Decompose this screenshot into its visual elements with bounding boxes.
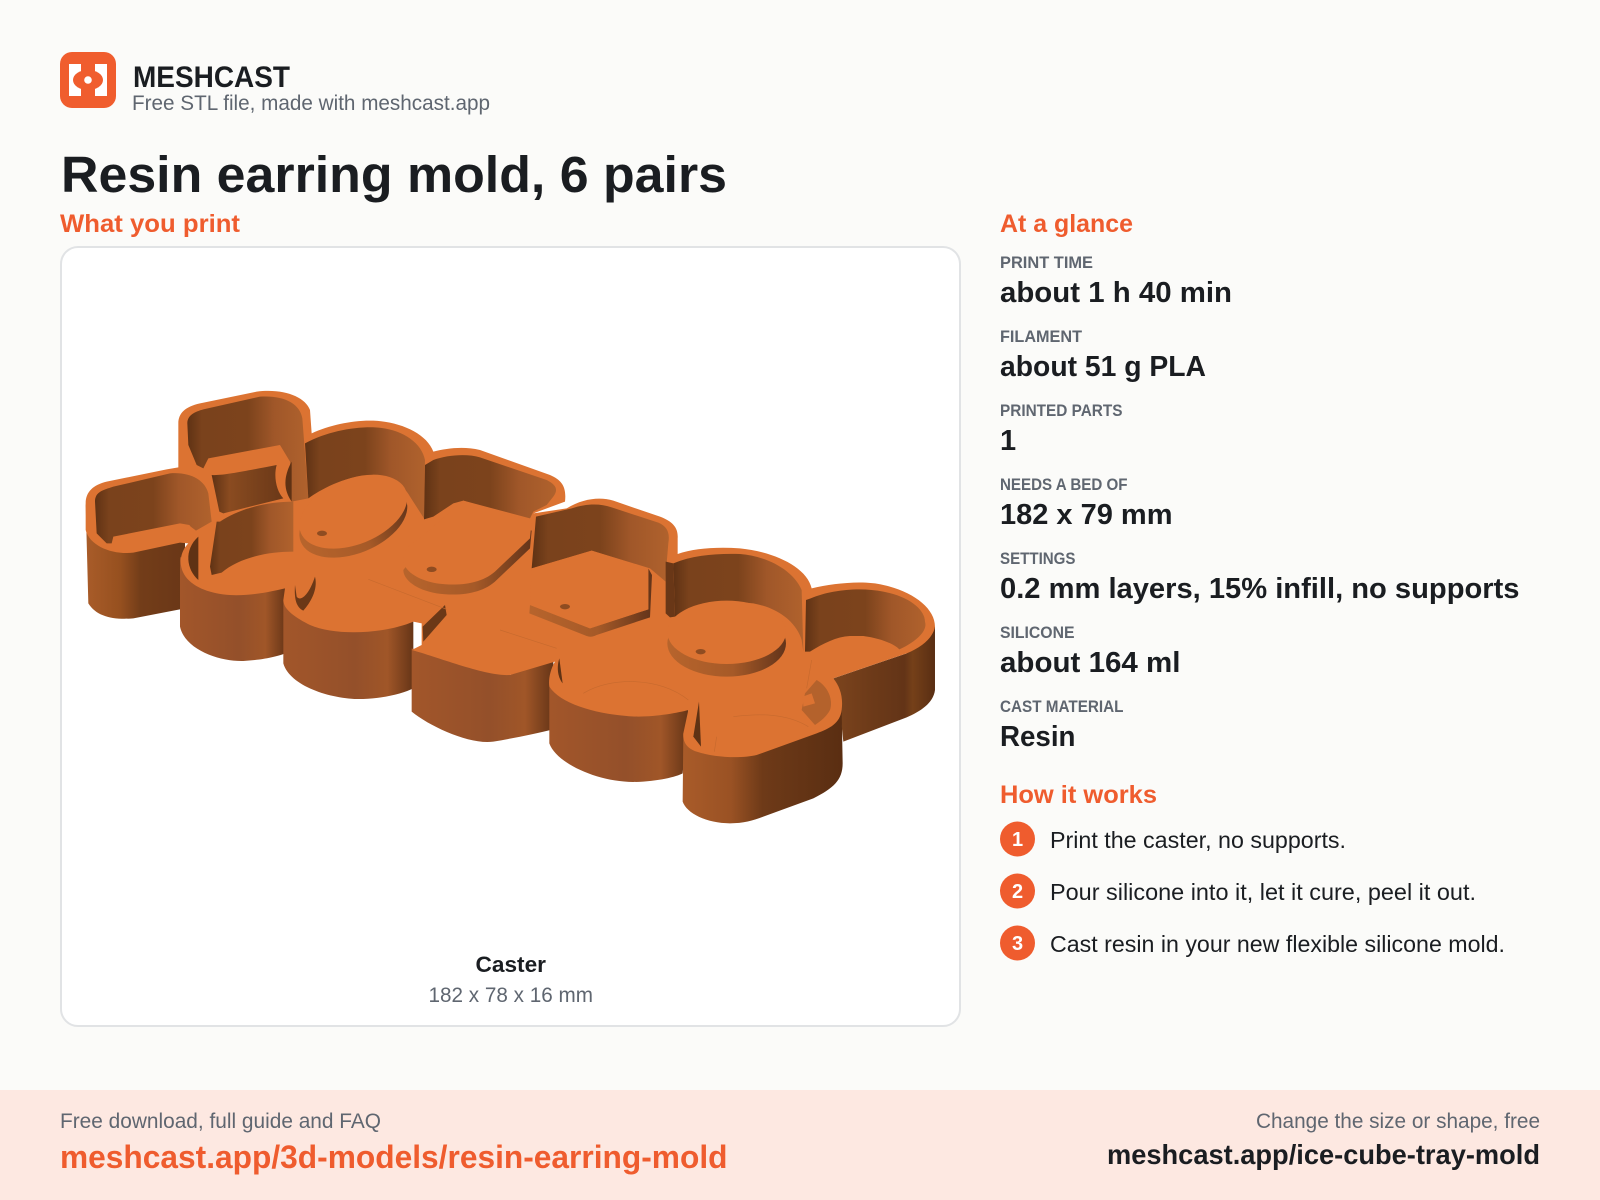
step 2: Pour silicone into it, let it cure, peel it out. [1050,879,1476,905]
step 1: 1 [1012,829,1023,851]
spec: settings: SETTINGS [1000,550,1076,568]
spec: print time [1000,254,1232,309]
step 2 [1000,874,1476,908]
right lobe back wall [805,589,925,652]
footer right caption: Change the size or shape, free [1256,1109,1540,1133]
spec: filament: about 51 g PLA [1000,351,1206,383]
spec: printed parts: 1 [1000,425,1016,457]
step 3: Cast resin in your new flexible silicone mold. [1050,931,1505,957]
raised oval earring blank [289,460,418,572]
spec: silicone: about 164 ml [1000,647,1180,679]
outer walls [86,503,935,823]
raised hexagon earring blank [529,551,652,637]
spec: silicone [1000,624,1180,679]
heading: At a glance: At a glance [1000,210,1133,238]
step 1 [1000,822,1346,856]
spec: bed size: NEEDS A BED OF [1000,476,1128,494]
3D model: resin earring mold caster [86,391,935,823]
spec: settings [1000,550,1520,605]
spec: printed parts: PRINTED PARTS [1000,402,1122,420]
spec: printed parts [1000,402,1122,457]
step 3 [1000,926,1505,960]
brand name: MESHCAST [133,61,290,94]
spec: cast material: CAST MATERIAL [1000,698,1124,716]
footer main link: meshcast.app/3d-models/resin-earring-mold [60,1139,728,1175]
header brand [60,52,490,115]
spec: cast material [1000,698,1124,753]
wall strip [666,562,675,617]
brand tagline: Free STL file, made with meshcast.app [132,92,490,115]
notches and interior details [558,658,831,752]
hexagon back wall [532,504,669,582]
raised round earring blank [667,601,786,677]
spec: print time: PRINT TIME [1000,254,1093,272]
spec: settings: 0.2 mm layers, 15% infill, no supports [1000,573,1520,605]
spec: print time: about 1 h 40 min [1000,277,1232,309]
round lobe back wall [673,554,803,652]
footer left caption: Free download, full guide and FAQ [60,1109,381,1133]
step 3: 3 [1012,933,1023,955]
title: Resin earring mold, 6 pairs [61,146,727,203]
inner back walls [95,396,557,648]
spec: filament: FILAMENT [1000,328,1082,346]
part dimensions: 182 x 78 x 16 mm [428,984,593,1007]
heading: What you print: What you print [60,210,241,238]
panel: model card [61,247,960,1026]
spec: bed size: 182 x 79 mm [1000,499,1172,531]
spec: bed size [1000,476,1172,531]
raised arch earring blank [403,501,532,595]
icon: Meshcast logo [60,52,116,108]
top face: rim and floor [86,391,935,757]
spec: filament [1000,328,1206,383]
spec: silicone: SILICONE [1000,624,1074,642]
part name: Caster [476,952,546,977]
footer secondary link: meshcast.app/ice-cube-tray-mold [1107,1139,1540,1170]
footer band [0,1090,1600,1200]
spec: cast material: Resin [1000,721,1076,753]
heading: How it works: How it works [1000,781,1157,809]
step 2: 2 [1012,881,1023,903]
step 1: Print the caster, no supports. [1050,827,1346,853]
right section of model [529,504,925,752]
